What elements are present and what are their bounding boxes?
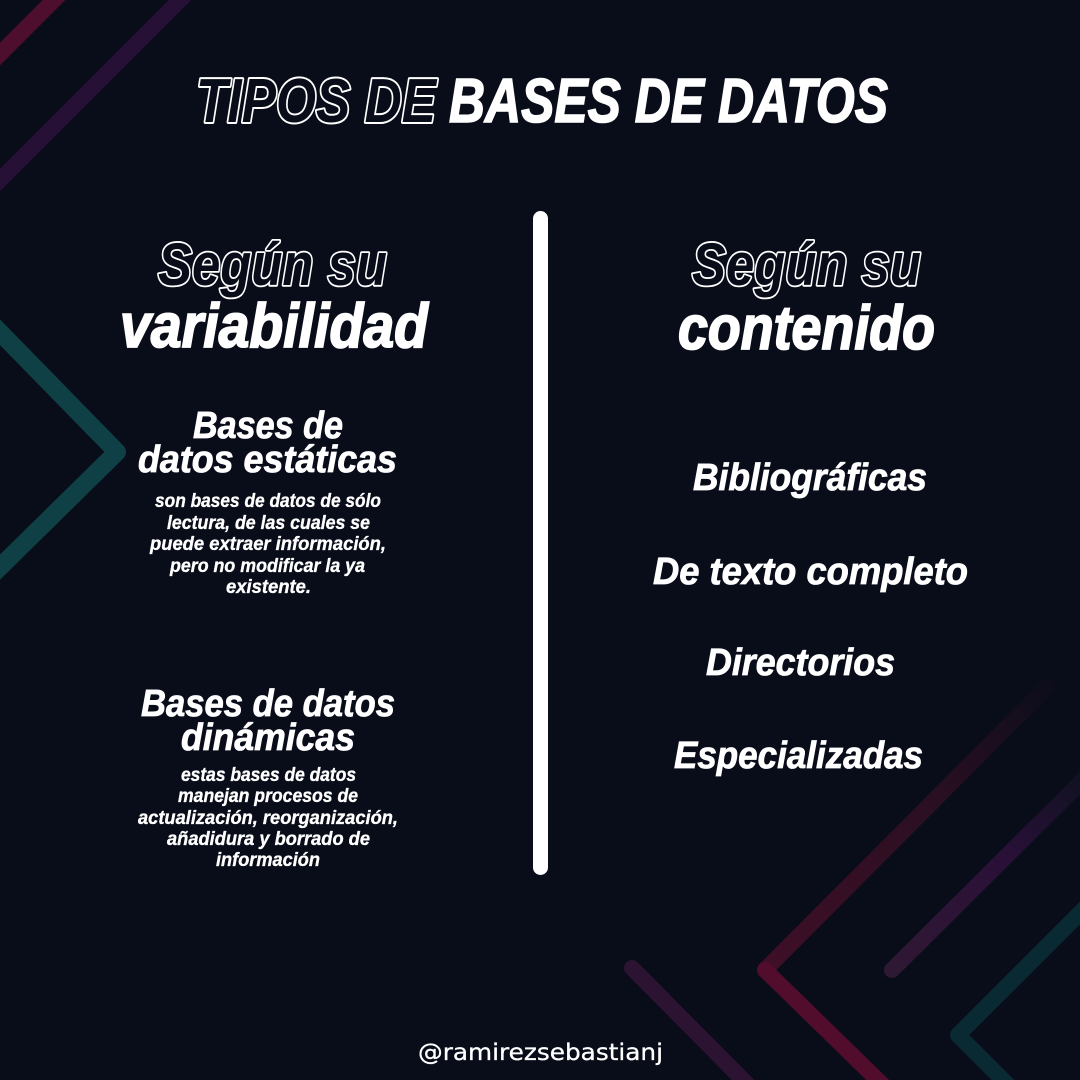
text block: dinámicas description: manejan procesos de <box>178 786 358 807</box>
title: TIPOS DE <box>196 67 437 136</box>
subheading: bases de datos estáticas: datos estáticas <box>138 439 397 481</box>
subheading: bases de datos estáticas: Bases de <box>193 405 343 447</box>
vertical divider <box>533 211 548 875</box>
heading: según su variabilidad: Según su <box>158 231 387 298</box>
list item: bibliográficas: Bibliográficas <box>693 457 927 499</box>
subheading: bases de datos estáticas <box>138 405 397 481</box>
heading: según su contenido: Según su <box>692 231 921 298</box>
text block: dinámicas description: estas bases de datos <box>181 765 356 786</box>
subheading: bases de datos dinámicas: dinámicas <box>181 717 355 759</box>
list item: directorios: Directorios <box>706 642 895 684</box>
text block: estáticas description: pero no modificar la ya <box>169 556 365 577</box>
heading: según su contenido <box>678 231 935 363</box>
title: BASES DE DATOS <box>449 67 888 136</box>
text block: estáticas description: lectura, de las cuales se <box>167 513 370 534</box>
text block: estáticas description: son bases de datos de sólo <box>155 491 381 512</box>
text block: dinámicas description: información <box>216 850 320 871</box>
text block: estáticas description <box>149 491 386 598</box>
subheading: bases de datos dinámicas: Bases de datos <box>141 683 395 725</box>
list item: especializadas: Especializadas <box>674 735 923 777</box>
text block: estáticas description: existente. <box>226 577 311 598</box>
footer handle: @ramirezsebastianj <box>418 1040 663 1066</box>
list item: de texto completo: De texto completo <box>653 551 968 593</box>
title <box>196 67 888 136</box>
text block: estáticas description: puede extraer información, <box>149 534 386 555</box>
subheading: bases de datos dinámicas <box>141 683 395 759</box>
heading: según su variabilidad: variabilidad <box>120 292 429 361</box>
text block: dinámicas description <box>138 765 398 871</box>
text block: dinámicas description: añadidura y borrado de <box>167 829 370 850</box>
panel: según su contenido <box>653 231 968 777</box>
heading: según su variabilidad <box>120 231 429 361</box>
text block: dinámicas description: actualización, reorganización, <box>138 808 398 829</box>
panel: según su variabilidad <box>120 231 429 871</box>
heading: según su contenido: contenido <box>678 294 935 363</box>
